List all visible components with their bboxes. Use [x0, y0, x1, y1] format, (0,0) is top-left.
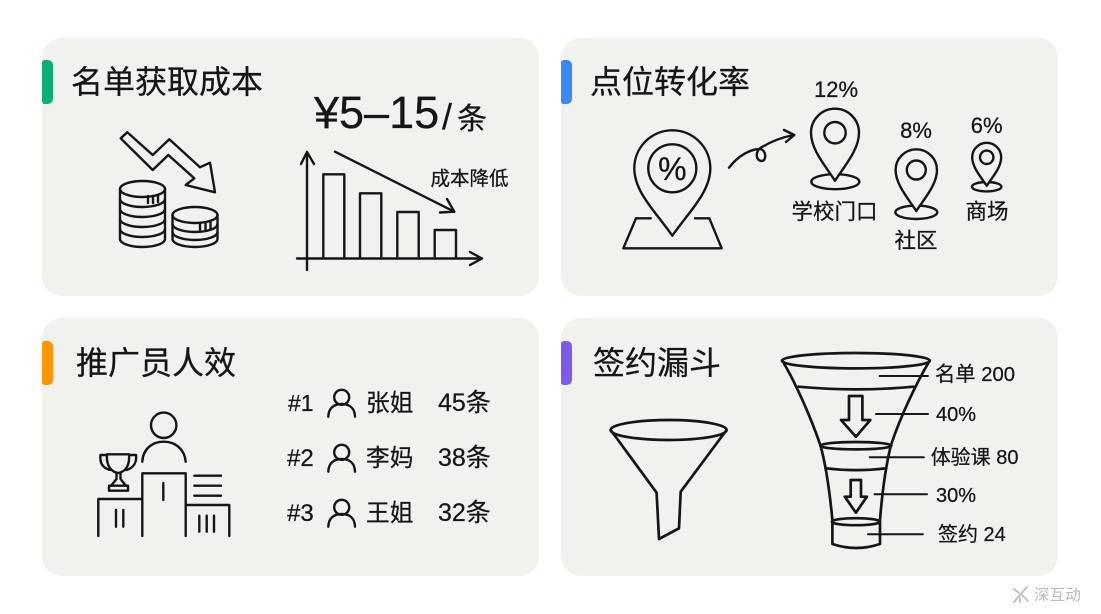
icon: tall coin stack [120, 181, 165, 247]
pin: 商场 [965, 113, 1009, 224]
pin: 商场: 6% [971, 113, 1003, 138]
row: rank 1 [288, 389, 491, 417]
icon: map base [623, 218, 722, 248]
icon: watermark mark [1014, 587, 1028, 602]
chart label: 成本降低 [430, 168, 509, 190]
panel: 点位转化率 [561, 38, 1058, 296]
pin: 学校门口 [791, 77, 878, 224]
row: rank 2: 38条 [438, 444, 491, 472]
funnel label: 体验课 80: 体验课 80 [931, 446, 1019, 469]
row: rank 3: 王姐 [366, 500, 413, 527]
icon: falling arrow [121, 132, 215, 192]
row: rank 3: #3 [287, 500, 314, 527]
row: rank 1: 张姐 [366, 390, 413, 417]
curved arrow [729, 130, 794, 168]
icon: large percent pin: % [658, 151, 687, 187]
funnel label: 名单 200: 名单 200 [935, 363, 1015, 386]
row: rank 1: 45条 [438, 389, 491, 417]
row: rank 2: #2 [287, 445, 314, 472]
row: rank 3 [287, 499, 491, 527]
arrow: 体验课 to 签约 [845, 480, 867, 513]
pin: 学校门口: 学校门口 [791, 200, 878, 224]
funnel label: 30%: 30% [936, 485, 976, 507]
icon: simple funnel [611, 420, 727, 539]
leader lines [868, 376, 928, 534]
pin: 社区: 社区 [894, 229, 938, 253]
icon: short coin stack [172, 207, 218, 247]
heading: 名单获取成本 [71, 64, 263, 100]
accent bar: blue [561, 60, 572, 104]
panel: 推广员人效 [42, 318, 539, 576]
heading: 点位转化率 [590, 64, 750, 100]
icon: podium with person and trophy [98, 413, 229, 536]
price: / [442, 96, 452, 137]
row: rank 1: #1 [288, 390, 314, 416]
price: ¥5–15 [313, 87, 439, 138]
accent bar: green [42, 60, 53, 104]
pin: 学校门口: 12% [814, 77, 858, 102]
price: 条 [457, 103, 487, 136]
funnel label: 40%: 40% [936, 404, 976, 426]
pin: 社区: 8% [900, 118, 932, 143]
accent bar: orange [42, 341, 53, 385]
pin: 社区 [894, 118, 938, 253]
arrow: 名单 to 体验课 [841, 396, 870, 437]
trend arrow [335, 152, 454, 212]
pin: 商场: 商场 [965, 200, 1009, 224]
row: rank 3: 32条 [438, 499, 491, 527]
accent bar: purple [561, 341, 572, 385]
bar chart: cost decline [297, 152, 482, 270]
panel: 签约漏斗 [561, 318, 1058, 576]
icon: large percent pin [634, 130, 710, 236]
heading: 推广员人效 [76, 345, 236, 381]
watermark: 深互动 [1034, 586, 1081, 604]
icon: trophy [100, 454, 136, 491]
funnel diagram [782, 353, 930, 548]
row: rank 2: 李妈 [366, 445, 413, 472]
row: rank 2 [287, 444, 491, 472]
watermark [1014, 586, 1081, 604]
panel: 名单获取成本 [42, 38, 539, 296]
funnel label: 签约 24: 签约 24 [938, 523, 1006, 546]
heading: 签约漏斗 [593, 345, 721, 381]
